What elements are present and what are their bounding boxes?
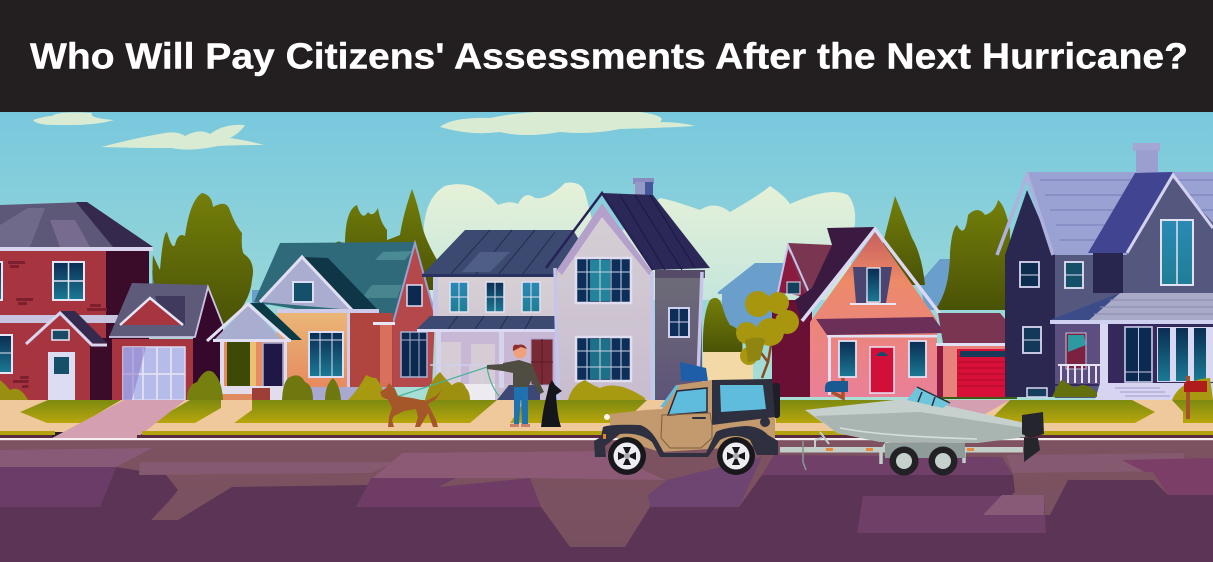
rear glass [720,385,766,412]
porch roof [417,316,556,329]
dark road lower [0,467,1213,562]
shoes [510,424,530,427]
window lower [576,337,631,381]
walls [0,251,108,400]
bricks [8,261,107,388]
house: coral gable [772,227,1025,399]
slate roof [422,230,600,275]
road [0,438,1213,562]
rear wheel [717,437,755,475]
small windows [1020,262,1083,397]
driveway right [930,400,1010,414]
house: tall gable [546,178,710,400]
header bar [0,0,1213,112]
window lower [0,335,12,373]
door handle [692,417,706,419]
fence [703,352,753,382]
headlight [604,414,610,420]
tree: left large [152,193,253,325]
chimney [633,178,654,217]
hard top [712,379,775,425]
window right [401,332,427,377]
foundation [290,387,395,400]
shirt and arms [487,360,544,394]
big window [1161,220,1193,285]
title: Who Will Pay Citizens' Assessments After the Next Hurricane? [30,36,1188,76]
door [48,352,75,400]
house: two-storey grey with slate roof [417,230,600,400]
porch [207,303,302,400]
brown dog [380,383,442,427]
garage door [123,347,185,400]
window left [839,341,856,377]
wall [435,277,558,400]
black dog [541,380,562,427]
house: blue-grey right [997,143,1213,400]
small tree [736,291,799,378]
trailer wheel rear [928,446,958,476]
driveway [52,400,185,438]
trees behind houses [152,189,1010,353]
door [870,347,894,393]
window main [309,332,343,377]
boat trailer and boat [780,387,1044,476]
porch windows [1125,327,1152,382]
sky background [0,112,1213,412]
background houses [152,259,960,335]
jeans [514,387,528,424]
roof box [680,362,708,381]
hair [513,344,527,351]
jeep [594,362,780,475]
fenders [881,441,964,464]
window gable [293,282,313,302]
door outline [661,413,712,448]
porch [437,332,557,384]
tree: behind teal roof [334,189,440,290]
curb line [0,438,1213,440]
windshield [907,387,950,408]
garage [935,313,1025,399]
clouds [33,112,695,150]
body [610,380,775,452]
upper window with shutters [850,267,896,305]
head [514,346,526,358]
house: garage [109,283,223,400]
tree: between coral and grey house [880,196,925,285]
entry gable [28,315,90,400]
trailer beam [780,447,1023,452]
roof [0,202,153,247]
eave [0,247,153,251]
engine [1022,412,1044,462]
porch roof [1050,293,1145,321]
bushes [0,371,1213,400]
lawns [20,400,1213,423]
door glass [668,388,707,415]
window upper [53,262,84,300]
tree: behind jeep [703,298,742,353]
leashes [396,367,499,397]
house: red brick left [0,202,153,400]
curb strips [0,431,1213,438]
mailbox: blue [825,378,848,398]
chimney [1133,143,1160,192]
front wheel [608,437,646,475]
window right [909,341,926,377]
windshield sliver [660,385,679,407]
window attic [407,285,422,306]
upper windows [450,282,468,312]
spare tyre [772,383,780,418]
window upper [576,258,631,303]
hull [805,398,1025,443]
large cloud behind houses [423,183,855,300]
indicator [603,434,606,439]
porch wall [1055,324,1213,386]
trailer wheel front [890,446,918,476]
window side [669,308,689,337]
ground sidewalk [0,400,1213,432]
mailbox: red [1184,376,1207,419]
steps [1095,383,1213,400]
house: teal roof [207,242,435,400]
dark arches and bumpers [594,425,778,457]
window upper edge [0,262,2,300]
fuel cap [760,417,770,427]
man walking dogs [396,344,544,427]
